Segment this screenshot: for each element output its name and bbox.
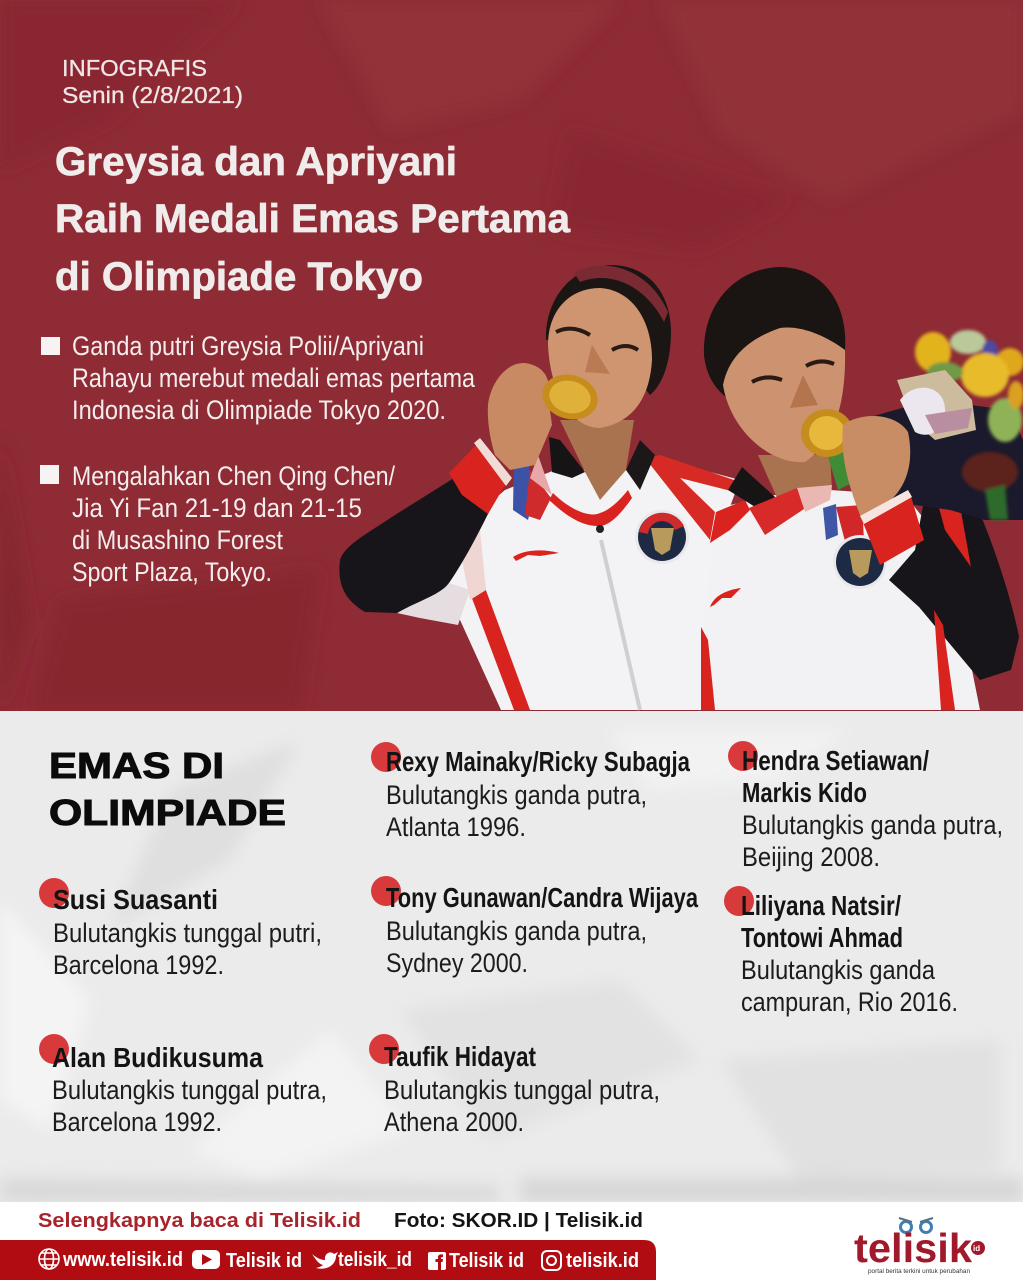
text: read more line: Selengkapnya baca di Telisik.id (38, 1210, 361, 1232)
entry: Alan Budikusuma: Bulutangkis tunggal putra, (52, 1075, 327, 1105)
title: Greysia dan Apriyani (55, 140, 457, 184)
text block: bullet two: di Musashino Forest (72, 525, 284, 555)
entry: Alan Budikusuma (39, 1034, 327, 1137)
text block: bullet one: Rahayu merebut medali emas pertama (72, 363, 475, 393)
icon: globe (39, 1249, 59, 1269)
entry: Susi Suasanti: Bulutangkis tunggal putri, (53, 918, 322, 948)
entry: Susi Suasanti: Barcelona 1992. (53, 950, 224, 980)
panel: footer (0, 1202, 1023, 1280)
lower left stripe (701, 627, 715, 710)
heading: EMAS DI OLIMPIADE: OLIMPIADE (49, 792, 286, 833)
entry: Liliyana Natsir/Tontowi Ahmad: Tontowi Ahmad (741, 922, 903, 953)
label: INFOGRAFIS date line: Senin (2/8/2021) (62, 82, 243, 108)
title: di Olimpiade Tokyo (55, 255, 423, 299)
text: Facebook name: Telisik id (449, 1250, 524, 1272)
panel: red hero background (0, 0, 1023, 712)
red collar V (549, 490, 632, 526)
figure: Greysia body and left sleeve (339, 420, 740, 710)
left shoulder red (710, 500, 750, 543)
title (55, 140, 571, 299)
medal ribbon (513, 450, 535, 520)
navy wrap (860, 400, 1023, 520)
entry: Hendra Setiawan/Markis Kido: Hendra Setiawan/ (742, 745, 929, 776)
neck (758, 455, 832, 500)
icon: YouTube (192, 1250, 220, 1269)
black forearm (339, 473, 490, 613)
title: Raih Medali Emas Pertama (55, 197, 571, 241)
text: photo credit: Foto: SKOR.ID | Telisik.id (394, 1210, 643, 1232)
mascot toy (897, 370, 976, 440)
black collar (728, 467, 775, 510)
entry: Liliyana Natsir/Tontowi Ahmad: Liliyana Natsir/ (741, 890, 901, 921)
entry: Tony Gunawan/Candra Wijaya (371, 876, 699, 978)
side stripe (470, 585, 530, 710)
entry: Taufik Hidayat: Bulutangkis tunggal putra, (384, 1075, 660, 1105)
label: INFOGRAFIS date line: INFOGRAFIS (62, 55, 207, 81)
entry: Taufik Hidayat (369, 1034, 660, 1137)
entry: Hendra Setiawan/Markis Kido: Beijing 2008. (742, 842, 880, 872)
face (548, 288, 652, 428)
text block: bullet one: Indonesia di Olimpiade Tokyo 2020. (72, 395, 446, 425)
entry: Rexy Mainaky/Ricky Subagja: Rexy Mainaky/Ricky Subagja (386, 746, 691, 777)
lower right stripe (934, 610, 955, 710)
face (723, 327, 845, 462)
text: YouTube name: Telisik id (226, 1250, 302, 1272)
red sleeve stripe (932, 478, 971, 567)
entry: Tony Gunawan/Candra Wijaya: Sydney 2000. (386, 948, 528, 978)
text block: bullet two: Sport Plaza, Tokyo. (72, 557, 272, 587)
hairband (574, 266, 668, 322)
entry: Taufik Hidayat: Athena 2000. (384, 1107, 524, 1137)
entry: Liliyana Natsir/Tontowi Ahmad: campuran, Rio 2016. (741, 987, 958, 1017)
entry: Taufik Hidayat: Taufik Hidayat (384, 1041, 536, 1072)
figure: Apriyani head (704, 267, 845, 462)
bar: social media links (0, 1240, 656, 1280)
text block: bullet one: Ganda putri Greysia Polii/Apriyani (72, 331, 424, 361)
figure: Greysia hand (488, 363, 552, 470)
bouquet with mascot toy (860, 330, 1023, 520)
logo: telisik.id: id (973, 1244, 980, 1253)
text block: bullet two: Jia Yi Fan 21-19 dan 21-15 (72, 493, 362, 523)
entry: Tony Gunawan/Candra Wijaya: Tony Gunawan/Candra Wijaya (386, 882, 699, 913)
panel: crumpled paper background (0, 711, 1023, 1202)
heading: EMAS DI OLIMPIADE (49, 745, 286, 833)
figure: Apriyani body and right sleeve (701, 455, 1019, 710)
logo: telisik.id: portal berita terkini untuk perubahan (868, 1269, 970, 1275)
entry: Rexy Mainaky/Ricky Subagja: Atlanta 1996. (386, 812, 526, 842)
cuff (862, 493, 924, 565)
zipper (601, 540, 640, 710)
hair (704, 267, 845, 400)
hair (546, 265, 671, 395)
entry: Liliyana Natsir/Tontowi Ahmad (724, 886, 958, 1017)
entry: Liliyana Natsir/Tontowi Ahmad: Bulutangkis ganda (741, 955, 935, 985)
heading: EMAS DI OLIMPIADE: EMAS DI (49, 745, 224, 786)
entry: Rexy Mainaky/Ricky Subagja: Bulutangkis ganda putra, (386, 780, 647, 810)
entry: Alan Budikusuma: Alan Budikusuma (52, 1042, 264, 1073)
emblem: Indonesia badge left (635, 510, 689, 564)
medal: Apriyani gold medal, leaf and hand (801, 409, 924, 565)
text block: bullet two: Mengalahkan Chen Qing Chen/ (72, 461, 396, 491)
entry: Susi Suasanti: Susi Suasanti (53, 884, 218, 915)
entry: Hendra Setiawan/Markis Kido: Markis Kido (742, 777, 867, 808)
logo: Li-Ning left (513, 550, 559, 561)
text: Twitter handle: telisik_id (338, 1249, 412, 1271)
logo: Li-Ning right (710, 588, 741, 607)
underarm (397, 583, 470, 625)
red cuff (449, 443, 508, 514)
text: Instagram handle: telisik.id (566, 1250, 639, 1272)
icon: Facebook (428, 1252, 446, 1270)
entry: Alan Budikusuma: Barcelona 1992. (52, 1107, 222, 1137)
medal: Greysia gold medal (537, 369, 603, 425)
label: INFOGRAFIS date line (62, 55, 243, 108)
emblem: Indonesia badge right (833, 535, 887, 589)
text: website: www.telisik.id (62, 1249, 183, 1271)
icon: Instagram (542, 1251, 561, 1270)
jacket (445, 457, 740, 710)
neck (560, 420, 634, 500)
entry: Hendra Setiawan/Markis Kido (728, 741, 1003, 872)
entry: Susi Suasanti (39, 878, 322, 980)
entry: Tony Gunawan/Candra Wijaya: Bulutangkis ganda putra, (386, 916, 647, 946)
black collar (549, 437, 585, 478)
ribbon (749, 488, 810, 535)
photo: Greysia and Apriyani kissing gold medals (339, 265, 1023, 710)
entry: Rexy Mainaky/Ricky Subagja (371, 742, 691, 842)
text block: bullet two (40, 461, 396, 587)
icon: Twitter (312, 1252, 338, 1269)
logo: telisik.id: telisik (854, 1225, 972, 1271)
figure: Greysia head (546, 265, 671, 428)
black sleeve (889, 480, 1019, 680)
shoulder stripe (645, 455, 740, 540)
text block: bullet one (41, 331, 475, 425)
